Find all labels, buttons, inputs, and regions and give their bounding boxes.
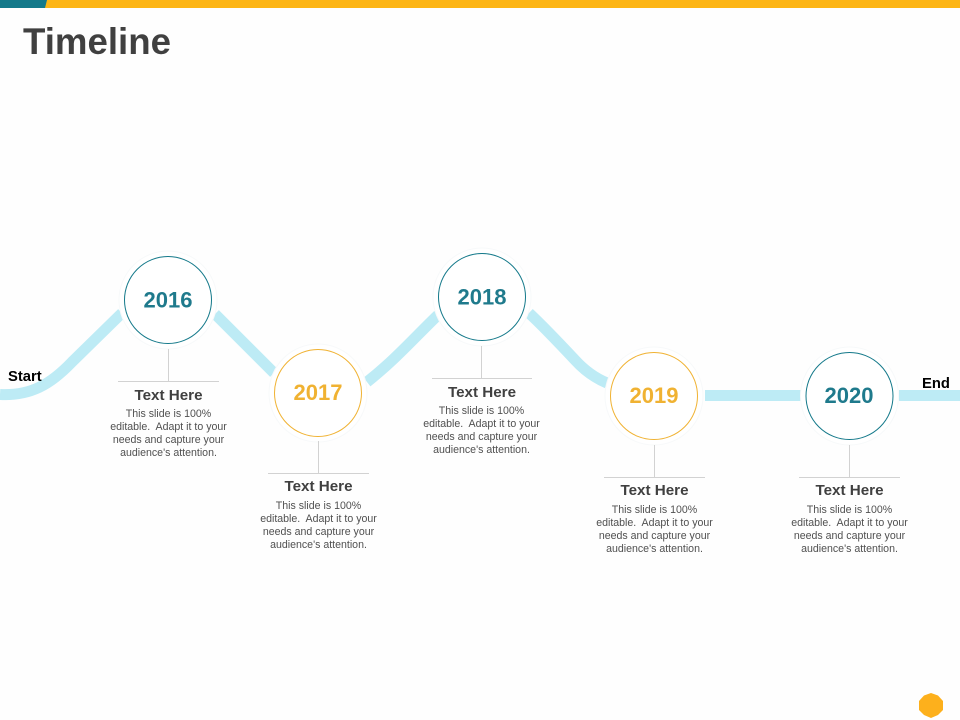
milestone 2020: 2020: [825, 383, 873, 408]
milestone 2020: Text Here: [815, 482, 884, 499]
milestone 2019: [596, 347, 713, 555]
milestone 2017: 2017: [294, 380, 342, 405]
top accent bar: [0, 0, 960, 8]
milestone 2016: Text Here: [134, 387, 203, 404]
milestone 2016: needs and capture your: [113, 434, 225, 446]
milestone 2017: editable. Adapt it to your: [260, 513, 377, 525]
milestone 2017: Text Here: [284, 478, 353, 495]
icon: corner octagon badge: [919, 693, 943, 718]
milestone 2020: editable. Adapt it to your: [791, 517, 908, 529]
milestone 2019: needs and capture your: [599, 530, 711, 542]
milestone 2017: audience's attention.: [270, 539, 367, 551]
milestone 2020: needs and capture your: [794, 530, 906, 542]
title: Timeline: [23, 21, 171, 62]
milestone 2018: [423, 248, 540, 456]
milestone 2020: This slide is 100%: [807, 504, 893, 516]
milestone 2017: [260, 344, 377, 551]
milestone 2016: [110, 251, 227, 459]
start label: Start: [8, 369, 42, 385]
milestone 2016: 2016: [144, 288, 192, 312]
milestone 2018: This slide is 100%: [439, 405, 525, 417]
milestone 2018: audience's attention.: [433, 444, 530, 456]
milestone 2017: needs and capture your: [263, 526, 375, 538]
end label: End: [922, 376, 950, 392]
milestone 2019: This slide is 100%: [612, 504, 698, 516]
milestone 2016: This slide is 100%: [126, 408, 212, 420]
milestone 2020: audience's attention.: [801, 543, 898, 555]
milestone 2018: editable. Adapt it to your: [423, 418, 540, 430]
milestone 2016: audience's attention.: [120, 447, 217, 459]
milestone 2019: Text Here: [620, 482, 689, 499]
milestone 2017: This slide is 100%: [276, 500, 362, 512]
timeline ribbon: [0, 313, 960, 396]
milestone 2019: editable. Adapt it to your: [596, 517, 713, 529]
milestone 2018: needs and capture your: [426, 431, 538, 443]
milestone 2019: audience's attention.: [606, 543, 703, 555]
milestone 2020: [791, 347, 908, 555]
milestone 2018: Text Here: [448, 384, 516, 401]
milestone 2016: editable. Adapt it to your: [110, 421, 227, 433]
milestone 2019: 2019: [630, 383, 678, 408]
milestone 2018: 2018: [458, 284, 506, 310]
